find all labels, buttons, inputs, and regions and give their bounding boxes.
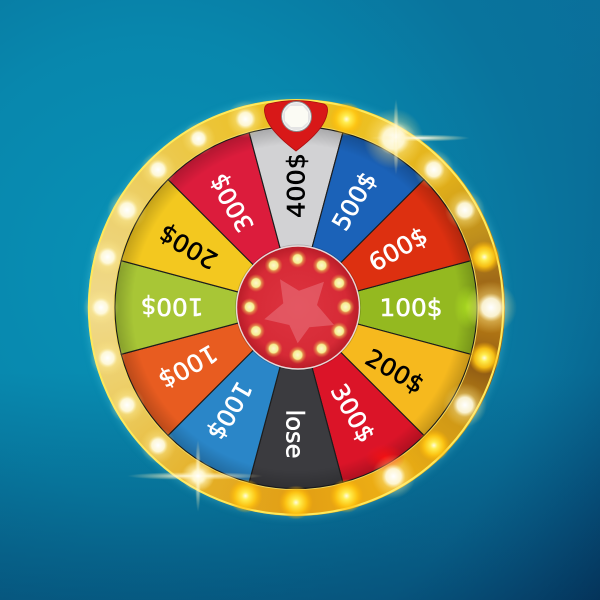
- pointer jewel: [281, 101, 312, 132]
- segment labels: 200$: [360, 344, 429, 399]
- pointer: [264, 100, 328, 151]
- golden wheel rim: [88, 99, 504, 516]
- center hub: [235, 244, 361, 370]
- wheel segments: [115, 127, 477, 488]
- segment labels: 400$: [282, 153, 310, 218]
- segment labels: [140, 153, 442, 458]
- segment labels: 300$: [325, 379, 380, 448]
- segment rim shading: [115, 126, 477, 488]
- hub lights: [241, 250, 355, 364]
- green glow from light: [454, 285, 482, 329]
- segment labels: 500$: [327, 167, 382, 236]
- segment labels: lose: [280, 409, 308, 459]
- segment labels: 200$: [154, 219, 223, 274]
- segment labels: 600$: [364, 222, 433, 277]
- rim lights: [83, 100, 517, 520]
- rim edge highlights: [89, 100, 503, 515]
- sparkle bottom left: [127, 440, 263, 512]
- segment labels: 100$: [153, 339, 222, 394]
- segment labels: 300$: [204, 168, 260, 237]
- segment labels: 100$: [140, 292, 204, 320]
- red glow from light: [365, 444, 405, 472]
- segment labels: 100$: [202, 376, 257, 445]
- segment labels: 100$: [379, 294, 443, 322]
- hub star: [264, 279, 334, 343]
- sparkle top right: [370, 99, 470, 175]
